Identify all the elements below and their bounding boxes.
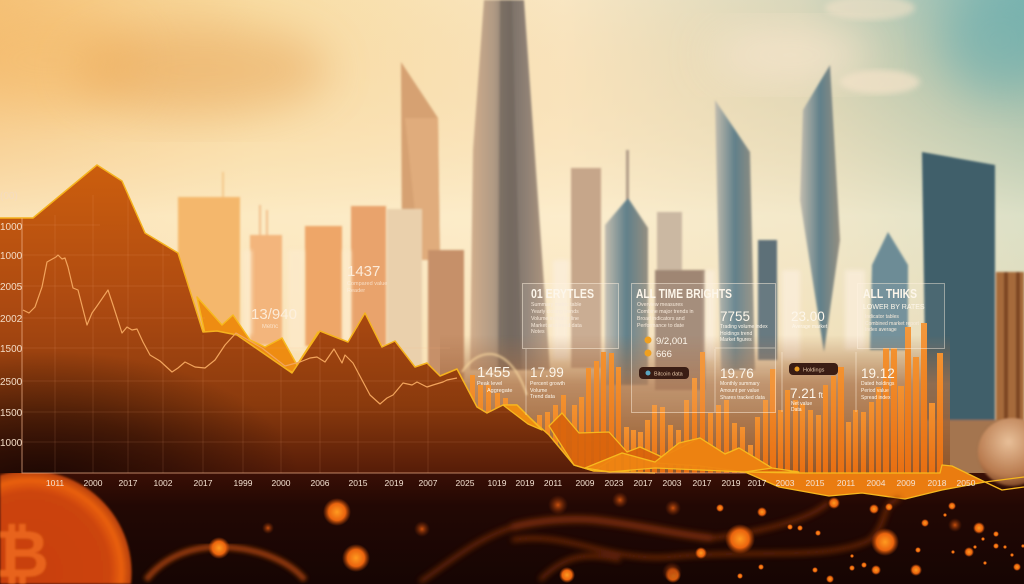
stat: 2300 [791, 309, 828, 330]
panel: 01 ERYTLES: 01 ERYTLES [531, 287, 594, 301]
dim background particles [262, 492, 962, 582]
stat: 2300: Average market [792, 324, 828, 330]
price line [23, 255, 457, 404]
panel: ALL THIKS: Indicator tables [865, 314, 899, 320]
callout: 1455: 1455 [477, 364, 510, 381]
panel: 01 ERYTLES: Volume indicator line [531, 316, 579, 322]
callout: 1455: Peak level [477, 381, 502, 387]
stat: 19.76 [715, 349, 765, 412]
decorative ring [146, 547, 305, 580]
stat: 7755: Trading volume index [720, 324, 768, 330]
stat: 17.99 [526, 349, 565, 415]
panel: ALL THIKS [858, 284, 944, 348]
stat: 19.12: Period value [861, 388, 889, 394]
x-axis year labels: 2011 [837, 478, 855, 488]
x-axis year labels: 2017 [693, 478, 712, 488]
x-axis year labels: 2017 [748, 478, 767, 488]
stat: 7755: Holdings trend [720, 331, 752, 337]
x-axis year labels: 2025 [456, 478, 475, 488]
icon: coin marker one [644, 336, 652, 344]
panel: 01 ERYTLES: Market and trend data [531, 323, 582, 329]
x-axis year labels: 2017 [634, 478, 653, 488]
y-axis labels: 1000 [0, 222, 23, 233]
stat: 19.12: 19.12 [861, 366, 895, 381]
panel: ALL THIKS: Index average [865, 327, 897, 333]
x-axis year labels: 1002 [154, 478, 173, 488]
panel: ALL TIME BRIGHTS: Bitcoin data [654, 372, 684, 378]
panel: ALL TIME BRIGHTS: Overview measures [637, 302, 683, 308]
x-axis year labels: 2007 [419, 478, 438, 488]
main area chart [0, 164, 655, 474]
x-axis year labels: 2003 [663, 478, 682, 488]
panel: ALL TIME BRIGHTS [632, 284, 776, 412]
stat: 17.99: Percent growth [530, 381, 565, 387]
icon: coin marker two [644, 350, 652, 356]
x-axis year labels: 2009 [897, 478, 916, 488]
stat: 7755: 7755 [720, 309, 750, 324]
y-axis labels [0, 191, 23, 449]
stat: 19.76: 19.76 [720, 366, 754, 381]
stat: 19.12 [856, 352, 895, 412]
callout: 13/940: Metric [262, 324, 278, 330]
callout: 1437: Reader [347, 288, 365, 294]
network waves [420, 498, 900, 582]
x-axis year labels: 1011 [46, 478, 64, 488]
button: status pill [789, 363, 838, 375]
stat: 17.99: Volume [530, 388, 547, 394]
stat: 2300: 23.00 [791, 309, 825, 324]
callout: 1455 [477, 364, 512, 394]
x-axis year labels: 2023 [605, 478, 624, 488]
glowing particles [208, 497, 1024, 583]
y-axis labels: 1000 [0, 438, 23, 449]
panel: 01 ERYTLES: Yearly closing trends [531, 309, 579, 315]
haze highlights between towers [243, 250, 865, 360]
secondary amber area [197, 297, 318, 376]
panel: ALL TIME BRIGHTS: ALL TIME BRIGHTS [636, 287, 732, 301]
lower amber area bands [503, 405, 1024, 499]
panel: ALL TIME BRIGHTS: Broad indicators and [637, 316, 685, 322]
x-axis year labels: 2050 [957, 478, 976, 488]
bar chart [470, 323, 943, 473]
y-axis labels: (00) [0, 191, 18, 202]
x-axis year labels: 1019 [488, 478, 507, 488]
y-axis labels: 2002 [0, 314, 23, 325]
callout: 1437 [347, 263, 387, 294]
panel: ALL THIKS: Combined market report [865, 321, 920, 327]
icon: bitcoin coin [0, 471, 132, 584]
stat: 19.76: Shares tracked data [720, 395, 765, 401]
x-axis year labels: 2000 [84, 478, 103, 488]
panel: 01 ERYTLES [522, 284, 618, 348]
stat: 19.12: Dated holdings [861, 381, 895, 387]
x-axis year labels: 2004 [867, 478, 886, 488]
panel: ALL THIKS: LOWER BY RATES [863, 304, 925, 311]
y-axis labels: 2005 [0, 282, 23, 293]
x-axis year labels: 2000 [272, 478, 291, 488]
x-axis year labels [46, 478, 976, 488]
stat: 7755 [720, 309, 768, 343]
x-axis year labels: 2019 [385, 478, 404, 488]
x-axis year labels: 2015 [349, 478, 368, 488]
panel: ALL THIKS: ALL THIKS [863, 287, 917, 301]
button: status pill: Holdings [803, 368, 825, 374]
panel: ALL TIME BRIGHTS: 9/2,001 [656, 336, 688, 347]
stat: 19.12: Spread index [861, 395, 891, 401]
stat: 7.21: 7.21 ft [790, 386, 824, 401]
bottom dark band [0, 473, 1024, 584]
callout: 1437: Compared value [347, 281, 387, 287]
panel: ALL TIME BRIGHTS: Combine major trends in [637, 309, 694, 315]
stat: 17.99: Trend data [530, 394, 555, 400]
callout: 1437: 1437 [347, 263, 380, 280]
x-axis year labels: 1999 [234, 478, 253, 488]
y-axis labels: 1500 [0, 408, 23, 419]
y-axis labels: 1000 [0, 251, 23, 262]
y-axis labels: 1500 [0, 344, 23, 355]
x-axis year labels: 2019 [516, 478, 535, 488]
x-axis year labels: 2018 [928, 478, 947, 488]
icon: sphere [978, 418, 1024, 486]
x-axis year labels: 2015 [806, 478, 825, 488]
callout: 1455: Aggregate [487, 388, 512, 394]
stat: 17.99: 17.99 [530, 365, 564, 380]
city base haze behind bars [440, 335, 950, 475]
panel: ALL TIME BRIGHTS: 666 [656, 349, 672, 360]
stat: 7.21: Data [791, 407, 802, 413]
x-axis year labels: 2019 [722, 478, 741, 488]
x-axis year labels: 2017 [194, 478, 213, 488]
button [639, 367, 689, 379]
x-axis year labels: 2006 [311, 478, 330, 488]
stat: 7.21: Net value [791, 401, 812, 407]
skyline buildings [178, 0, 1024, 475]
arc decoration [462, 354, 527, 395]
panel: 01 ERYTLES: Summary metric table [531, 302, 582, 308]
x-axis year labels: 2017 [119, 478, 138, 488]
x-axis year labels: 2003 [776, 478, 795, 488]
panel: ALL TIME BRIGHTS: Performance to date [637, 323, 684, 329]
callout: 13/940: 13/940 [251, 306, 297, 323]
stat: 19.76: Monthly summary [720, 381, 760, 387]
stat: 7.21 [782, 352, 824, 413]
x-axis year labels: 2011 [544, 478, 562, 488]
x-axis year labels: 2009 [576, 478, 595, 488]
y-axis labels: 2500 [0, 377, 23, 388]
chart grid and axes [22, 195, 560, 473]
stat: 19.76: Amount per value [720, 388, 759, 394]
panel: 01 ERYTLES: Notes [531, 329, 545, 335]
stat: 7755: Market figures [720, 337, 752, 343]
